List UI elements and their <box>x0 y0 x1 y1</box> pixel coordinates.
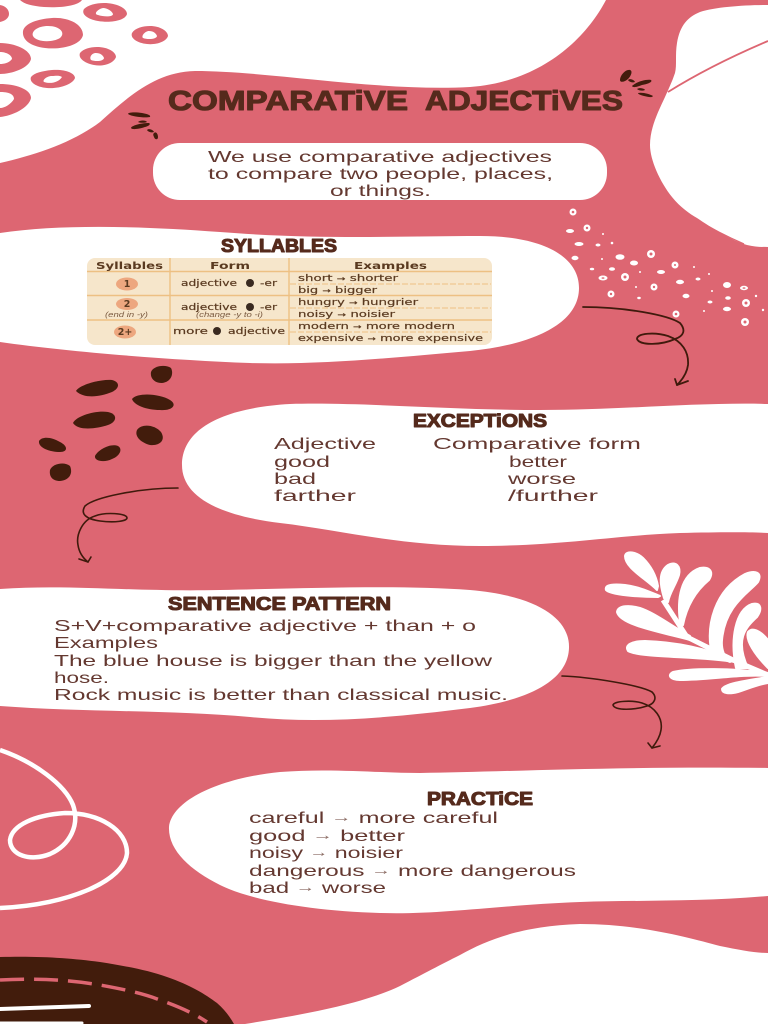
icon: dark blobs <box>39 366 174 481</box>
heading: sentence pattern: SENTENCE PATTERN <box>168 593 391 614</box>
title: ADJECTiVES <box>425 85 623 116</box>
panel: sentence pattern <box>0 587 569 720</box>
practice list: better <box>333 828 406 845</box>
bottom-right white wave <box>245 924 768 1024</box>
practice list: more careful <box>352 810 498 827</box>
table: syllables: 1 <box>124 279 130 290</box>
sentence pattern text: Rock music is better than classical music. <box>54 687 508 704</box>
practice list: → <box>296 880 315 894</box>
table: syllables: Form <box>210 261 250 272</box>
table: syllables: adjective <box>181 303 238 313</box>
exceptions list: Comparative form <box>433 436 641 453</box>
panel: syllables <box>0 227 579 363</box>
table: syllables: (change -y to -i) <box>196 312 263 319</box>
table: syllables: noisy → noisier <box>298 310 395 320</box>
practice list: noisy <box>249 845 286 862</box>
icon: white leaf branch <box>606 552 768 693</box>
table: syllables: -er <box>260 279 277 289</box>
sentence pattern text: The blue house is bigger than the yellow <box>54 653 493 670</box>
title <box>168 85 623 116</box>
intro text <box>208 149 553 200</box>
heading: exceptions: EXCEPTiONS <box>413 410 547 431</box>
table: syllables: modern → more modern <box>298 322 455 332</box>
table: syllables: big → bigger <box>298 286 377 296</box>
arrow: exceptions to pattern <box>78 488 178 562</box>
sentence pattern text: Examples <box>54 635 158 652</box>
dots decoration <box>566 208 764 326</box>
arrow: pattern to practice <box>562 676 661 748</box>
heading: syllables: SYLLABLES <box>221 235 337 256</box>
practice list: → <box>371 862 391 878</box>
table: syllables: 2+ <box>118 327 132 338</box>
exceptions list: /further <box>508 488 599 505</box>
practice list: careful <box>249 810 297 827</box>
table: syllables: Syllables <box>96 261 163 272</box>
top-right white blob <box>650 5 768 247</box>
table: syllables: Examples <box>354 261 427 272</box>
table: syllables <box>87 258 492 345</box>
table: syllables: hungry → hungrier <box>298 298 418 308</box>
dark brown bottom-left shape <box>0 957 234 1024</box>
panel: practice <box>169 768 768 913</box>
exceptions list: better <box>509 454 568 471</box>
practice list: → <box>331 810 352 824</box>
heading: practice: PRACTiCE <box>427 788 533 809</box>
sentence pattern text <box>54 618 508 704</box>
exceptions list: bad <box>274 471 316 488</box>
table: syllables: short → shorter <box>298 274 398 284</box>
intro text: We use comparative adjectives <box>208 149 552 166</box>
table: syllables: (end in -y) <box>105 312 148 319</box>
practice list: more dangerous <box>391 863 576 880</box>
table: syllables: adjective <box>228 327 286 337</box>
exceptions list: Adjective <box>274 436 376 453</box>
practice list: worse <box>315 880 386 897</box>
sentence pattern text: S+V+comparative adjective + than + o <box>54 618 476 635</box>
practice list: noisier <box>328 845 404 862</box>
exceptions list <box>274 436 641 505</box>
panel: intro <box>153 143 607 200</box>
sentence pattern text: hose. <box>54 670 109 687</box>
exceptions list: farther <box>274 488 357 505</box>
decorative rings top-left <box>0 0 168 117</box>
panel: exceptions <box>182 404 768 546</box>
title: COMPARATiVE <box>168 85 408 116</box>
practice list: good <box>249 828 285 845</box>
practice list: → <box>312 828 333 842</box>
arrow: syllables to exceptions <box>583 307 688 385</box>
practice list: dangerous <box>249 863 325 880</box>
icon: white loop swirl <box>0 750 127 908</box>
practice list: bad <box>249 880 276 897</box>
practice list: → <box>310 844 328 860</box>
icon: left title sparkle <box>128 112 158 139</box>
table: syllables: expensive → more expensive <box>298 334 484 344</box>
exceptions list: worse <box>506 471 576 488</box>
icon: right title sparkle <box>620 70 653 97</box>
table: syllables: more <box>173 327 209 337</box>
exceptions list: good <box>274 454 330 471</box>
table: syllables: -er <box>260 303 277 313</box>
intro text: or things. <box>330 183 431 200</box>
top-left white shape <box>0 0 606 163</box>
intro text: to compare two people, places, <box>208 166 553 183</box>
table: syllables: 2 <box>124 299 130 310</box>
table: syllables: adjective <box>181 279 238 289</box>
practice list <box>249 810 576 897</box>
